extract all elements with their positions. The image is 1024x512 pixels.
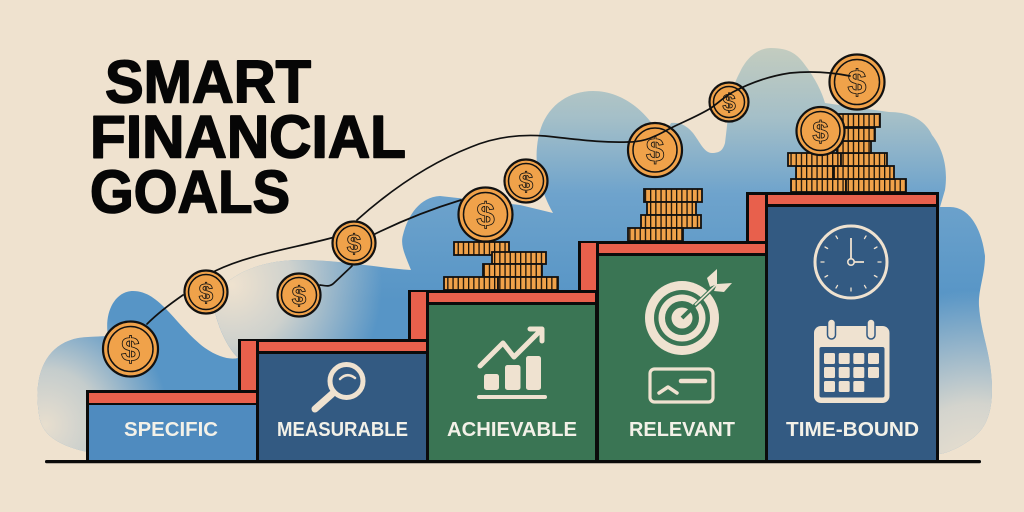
- icon: card: [650, 369, 713, 402]
- coin 9: $: [848, 64, 867, 102]
- coin 8: $: [722, 90, 736, 116]
- icon: target with arrow: [645, 269, 732, 355]
- coin 2: [184, 270, 228, 314]
- step 5: time-bound: [746, 192, 939, 462]
- coin 5: [458, 188, 512, 242]
- step 1: specific: [86, 390, 259, 462]
- label: specific: SPECIFIC: [124, 419, 218, 441]
- label: time-bound: TIME-BOUND: [786, 419, 919, 441]
- coin 6: [504, 160, 548, 202]
- step 4: relevant: [578, 241, 768, 462]
- coin 2: $: [199, 278, 214, 308]
- coin 9: [830, 54, 884, 110]
- coin 5: $: [476, 196, 495, 233]
- title: GOALS: [90, 158, 290, 226]
- step 3: achievable: [408, 290, 598, 462]
- icon: growth chart: [479, 329, 545, 397]
- blue cloud backdrop: [37, 48, 992, 454]
- coin 10: $: [812, 116, 829, 148]
- coin 3: [278, 274, 320, 316]
- step 2: measurable: [238, 339, 429, 462]
- title: FINANCIAL: [90, 104, 406, 170]
- label: measurable: MEASURABLE: [277, 419, 408, 441]
- icon: calendar: [814, 319, 890, 403]
- ground line: [45, 460, 981, 463]
- coin 1: $: [121, 331, 140, 369]
- growth path line over coins: [628, 72, 850, 142]
- coin stack: achievable step: [444, 242, 558, 290]
- staircase: [86, 192, 939, 462]
- coin stack: time-bound step: [788, 114, 906, 192]
- coin stack: relevant step: [628, 189, 702, 241]
- coin 1: [103, 322, 158, 376]
- growth path line: [147, 135, 628, 324]
- coin 10: [796, 107, 844, 155]
- title: [90, 48, 406, 226]
- icon: clock: [815, 226, 887, 298]
- coin 7: $: [646, 132, 664, 168]
- coin 7: [628, 123, 682, 177]
- label: achievable: ACHIEVABLE: [447, 419, 577, 441]
- coin 4: $: [347, 228, 362, 258]
- label: relevant: RELEVANT: [629, 419, 735, 441]
- coin 6: $: [519, 166, 534, 196]
- coin 4: [332, 222, 376, 264]
- coin 3: $: [292, 280, 307, 310]
- title: SMART: [105, 48, 311, 116]
- icon: magnifying glass: [315, 364, 363, 409]
- coin 8: [710, 82, 748, 122]
